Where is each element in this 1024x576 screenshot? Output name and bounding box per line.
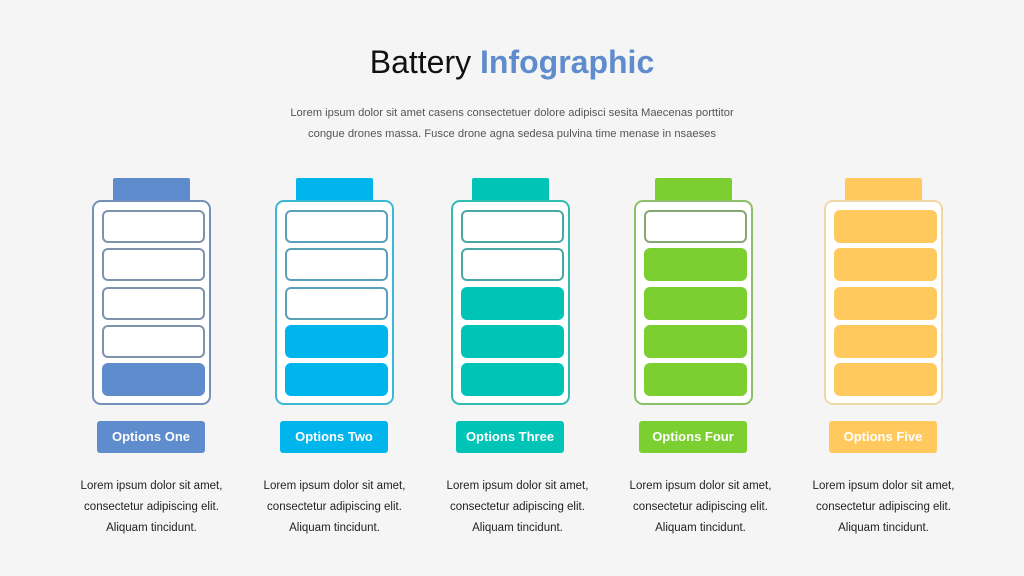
battery three bbox=[451, 178, 570, 405]
text one: consectetur adipiscing elit. bbox=[84, 501, 219, 513]
text three: Lorem ipsum dolor sit amet, bbox=[447, 480, 588, 492]
text three bbox=[447, 480, 588, 534]
text one bbox=[81, 480, 222, 534]
label two: Options Two bbox=[295, 429, 373, 444]
text four: consectetur adipiscing elit. bbox=[633, 501, 768, 513]
subtitle text: Lorem ipsum dolor sit amet casens consectetuer dolore adipisci sesita Maecenas porttitor congue drones massa. Fusce drone agna sedesa pulvina time menase in nsaeses bbox=[290, 107, 734, 140]
label one bbox=[97, 421, 205, 453]
label one: Options One bbox=[112, 429, 190, 444]
battery four bbox=[634, 178, 753, 405]
text two: Aliquam tincidunt. bbox=[289, 522, 380, 534]
text one: Aliquam tincidunt. bbox=[106, 522, 197, 534]
text five bbox=[813, 480, 954, 534]
title: Battery Infographic bbox=[370, 44, 654, 80]
text five: Lorem ipsum dolor sit amet, bbox=[813, 480, 954, 492]
text three: consectetur adipiscing elit. bbox=[450, 501, 585, 513]
battery five bbox=[824, 178, 943, 405]
label four bbox=[639, 421, 747, 453]
text one: Lorem ipsum dolor sit amet, bbox=[81, 480, 222, 492]
battery two bbox=[275, 178, 394, 405]
text four: Lorem ipsum dolor sit amet, bbox=[630, 480, 771, 492]
text five: consectetur adipiscing elit. bbox=[816, 501, 951, 513]
text two: Lorem ipsum dolor sit amet, bbox=[264, 480, 405, 492]
label four: Options Four bbox=[652, 429, 734, 444]
label five: Options Five bbox=[844, 429, 922, 444]
label three: Options Three bbox=[466, 429, 554, 444]
label five bbox=[829, 421, 937, 453]
text four bbox=[630, 480, 771, 534]
label three bbox=[456, 421, 564, 453]
text five: Aliquam tincidunt. bbox=[838, 522, 929, 534]
text four: Aliquam tincidunt. bbox=[655, 522, 746, 534]
battery one bbox=[92, 178, 211, 405]
text two: consectetur adipiscing elit. bbox=[267, 501, 402, 513]
text three: Aliquam tincidunt. bbox=[472, 522, 563, 534]
label two bbox=[280, 421, 388, 453]
text two bbox=[264, 480, 405, 534]
